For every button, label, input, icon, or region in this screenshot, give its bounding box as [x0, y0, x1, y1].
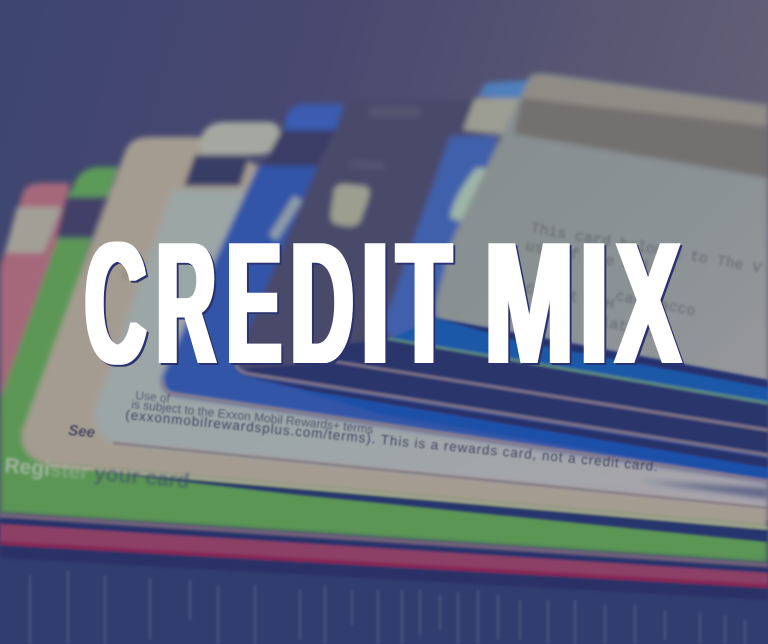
title: CREDIT MIX: R [156, 206, 216, 400]
title: CREDIT MIX: I [580, 206, 608, 401]
title: CREDIT MIX [85, 205, 680, 401]
card: red [0, 183, 70, 400]
small print on grey card: This card belongs to The V [529, 220, 763, 278]
small print on rewards card: See [68, 422, 96, 441]
small print on grey card: card acco [614, 288, 697, 320]
small print on grey card: lations, [599, 314, 673, 345]
small print on grey card: use of the holder [524, 238, 678, 281]
title: CREDIT MIX: T [397, 207, 451, 401]
small print on rewards card: (exxonmobilrewardsplus.com/terms). This is a rewards card, not a credit card. [125, 407, 659, 474]
small print on grey card [515, 220, 763, 345]
title: CREDIT MIX: C [85, 207, 146, 401]
title: CREDIT MIX: X [616, 205, 680, 400]
card: dark [236, 100, 768, 455]
title: CREDIT MIX: E [227, 206, 281, 400]
small print on green card: Register your card [4, 454, 190, 493]
card: blue [162, 104, 768, 482]
shadow on rewards card [640, 481, 768, 499]
upper parts of the fanned cards [0, 73, 768, 563]
card: grey top card with magnetic stripe [434, 73, 768, 382]
title: CREDIT MIX: D [290, 206, 354, 401]
title: CREDIT MIX: M [484, 205, 574, 400]
small print on rewards card: Use of [135, 388, 171, 406]
small print on grey card: account ACH [515, 278, 616, 314]
card: blue with cream panel [385, 80, 768, 405]
title: CREDIT MIX: I [361, 206, 389, 401]
card: tan [22, 137, 768, 527]
small print on rewards card: is subject to the Exxon Mobil Rewards+ terms [131, 397, 374, 436]
icon: card chip [331, 184, 369, 226]
card: white rewards card [95, 122, 768, 508]
wood grain [30, 570, 745, 644]
card: green [0, 167, 768, 563]
card edges [0, 318, 768, 600]
